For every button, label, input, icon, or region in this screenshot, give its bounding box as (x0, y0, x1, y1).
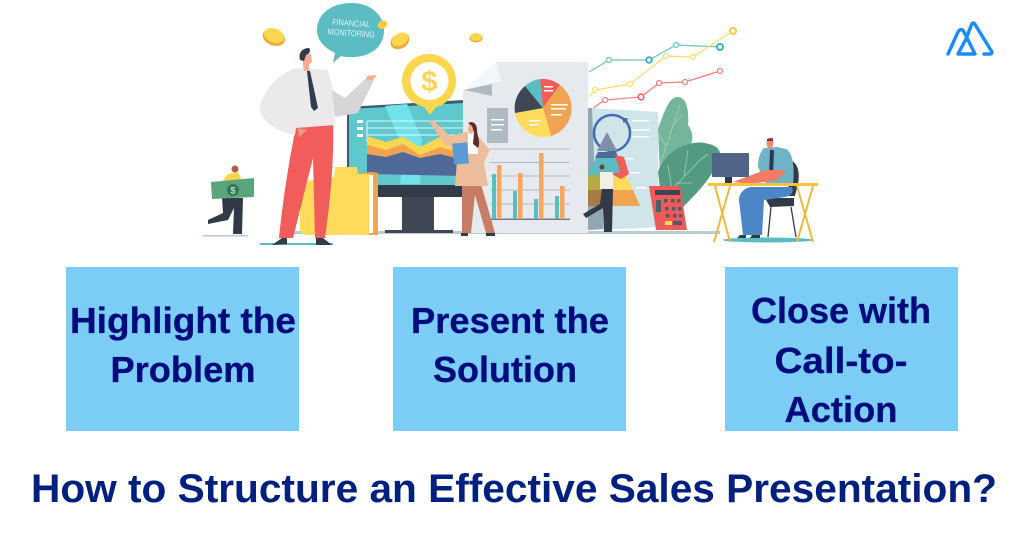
step box: present the solution: Solution (433, 349, 577, 390)
leaves (658, 97, 720, 207)
woman presenting (429, 120, 495, 236)
small man carrying banknote (208, 166, 254, 234)
red calculator (649, 186, 687, 230)
speech bubble: financial monitoring: FINANCIAL (332, 17, 371, 29)
step box: close with call-to-action: Action (784, 389, 898, 430)
monitor (347, 100, 464, 233)
ground shadows (203, 231, 720, 236)
man working at desk (708, 138, 818, 242)
illustration: financial team with charts (203, 3, 818, 245)
main man in red trousers (260, 48, 377, 245)
woman with magnifying glass (583, 115, 630, 232)
dollar location pin: $ (421, 66, 438, 98)
step box: highlight the problem: Highlight the (70, 300, 296, 341)
step box: close with call-to-action (725, 267, 958, 431)
yellow folder (300, 167, 378, 235)
speech bubble: financial monitoring: MONITORING (327, 26, 375, 40)
step box: close with call-to-action: Close with (751, 290, 931, 331)
pyramid poster (588, 108, 658, 230)
step box: present the solution (393, 267, 626, 431)
step box: close with call-to-action: Call-to- (774, 340, 908, 381)
title: How to Structure an Effective Sales Presentation? (31, 467, 997, 511)
speech bubble: financial monitoring (317, 3, 384, 63)
bar chart (490, 149, 570, 220)
step box: present the solution: Present the (411, 300, 609, 341)
growth line charts (589, 28, 736, 108)
small man carrying banknote: $ (230, 186, 236, 196)
step box: highlight the problem (66, 267, 299, 431)
dollar location pin (402, 54, 456, 115)
logo icon (948, 23, 992, 54)
pie chart (515, 79, 572, 137)
icon: gold coins (260, 19, 482, 52)
step box: highlight the problem: Problem (110, 349, 255, 390)
note card (487, 108, 508, 143)
document with pie and bar charts (463, 62, 588, 233)
